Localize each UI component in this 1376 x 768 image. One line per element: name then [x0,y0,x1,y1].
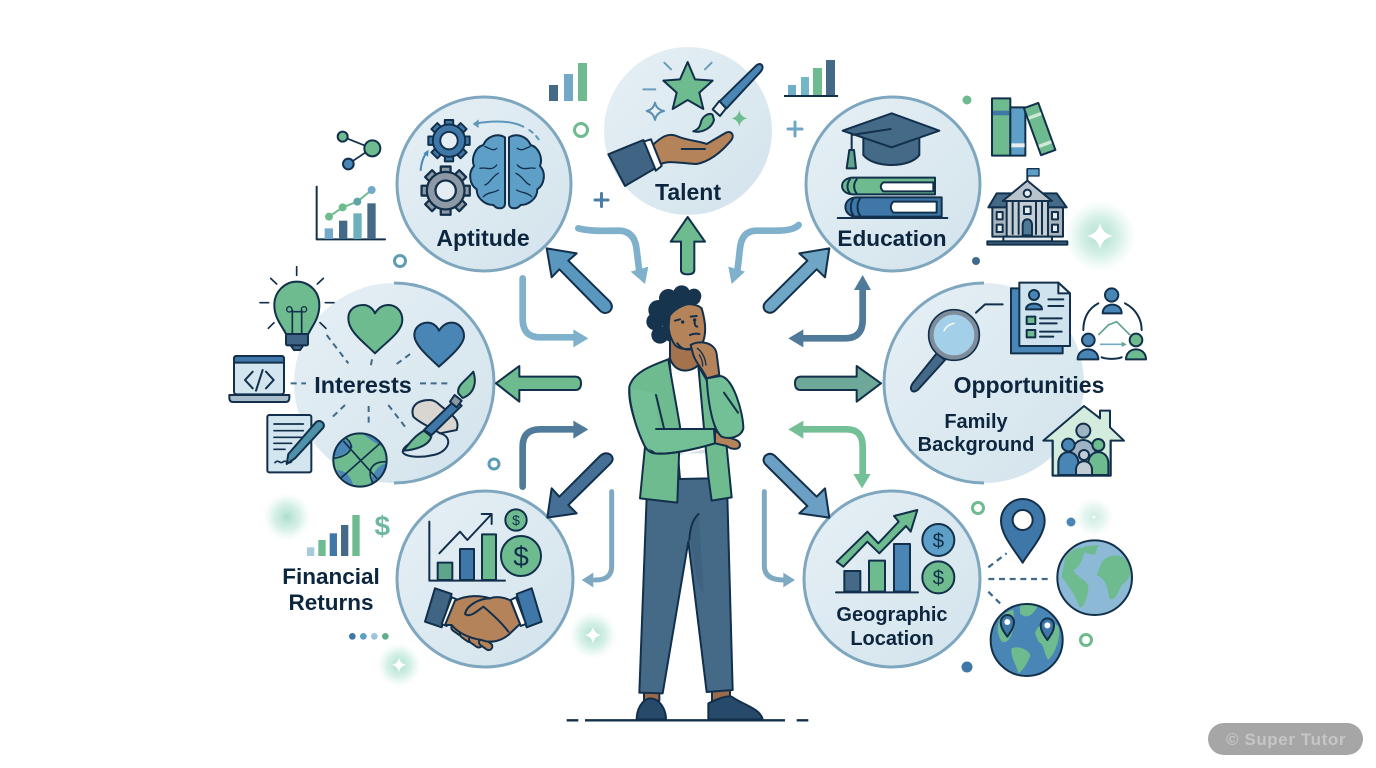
label: Geographic Location: Geographic [836,604,948,626]
label: Financial Returns: Financial [282,564,380,589]
icon: financial bars: $ [375,510,391,541]
torso and arms [629,358,743,503]
arrow: to Financial Returns [547,453,613,518]
panel: Geographic Location [804,491,980,667]
label: Family Background: Family [944,411,1008,433]
glow: bottom left sparkle [377,643,421,687]
icon: financial bars [307,510,391,640]
arrow: to Geographic Location [764,454,829,518]
arrow: to Talent [671,217,705,274]
curved arrow: top right [728,225,799,284]
icon: chart and coins: $ [933,567,945,590]
curved arrow: lower right [764,492,795,587]
curved arrow: lower left [582,492,612,587]
icon: cap and books [838,113,947,218]
icon group: network and line chart [317,132,385,239]
glow: lower right [1074,497,1114,537]
icon: hand, star and brush [608,62,763,186]
icon: chart, coins and handshake [425,509,542,652]
watermark badge [1208,723,1363,755]
glow: left teal [263,493,311,541]
legs and shoes [637,477,763,719]
small decorative dots and rings [394,96,1092,672]
curved arrow: left lower [523,421,588,487]
icon cluster: opportunities [911,283,1146,476]
arrow: to Opportunities [795,366,881,402]
icon: chart and coins: $ [933,529,945,552]
label: Education: Education [837,226,947,251]
head, hair and hand [646,285,719,378]
label: Talent: Talent [655,179,721,205]
glow: lower centre sparkle [569,611,617,659]
curved arrow: right upper [788,275,871,347]
icon: chart, coins and handshake: $ [512,512,520,528]
arrow: to Aptitude [547,248,612,313]
icon: gears and brain [421,119,544,215]
glow: right sparkle [1064,200,1136,272]
curved arrow: left upper [523,278,588,347]
panel: Talent [604,47,772,215]
arrows around the central figure [496,217,881,587]
label: Interests: Interests [314,372,412,398]
arrow: to Education [764,248,829,313]
panel: Aptitude [397,97,571,271]
central figure: thinking person [567,285,808,720]
icon: chart, coins and handshake: $ [513,541,529,572]
icon: chart and coins [836,510,954,593]
label: Financial Returns: Returns [288,590,374,615]
label: Opportunities: Opportunities [954,372,1104,398]
icon cluster: location pin and globes [988,499,1132,676]
icon: bars above education [784,60,838,97]
panel: Interests [229,267,494,487]
arrow: to Interests [496,366,581,402]
hair curls [646,285,701,344]
label: Family Background: Background [918,434,1034,456]
label: Geographic Location: Location [850,628,934,650]
icon cluster: interests [229,267,475,487]
icon: books and university building [987,98,1067,245]
ground line [567,717,808,724]
panel: Education [806,97,980,271]
panel: Opportunities and Family Background [884,283,1146,483]
curved arrow: right lower [788,421,871,488]
icon: bars above aptitude [549,63,587,101]
label: Aptitude: Aptitude [436,225,530,251]
panel: Financial Returns [397,491,573,667]
curved arrow: top left [578,228,648,284]
watermark badge: © Super Tutor [1226,730,1346,749]
